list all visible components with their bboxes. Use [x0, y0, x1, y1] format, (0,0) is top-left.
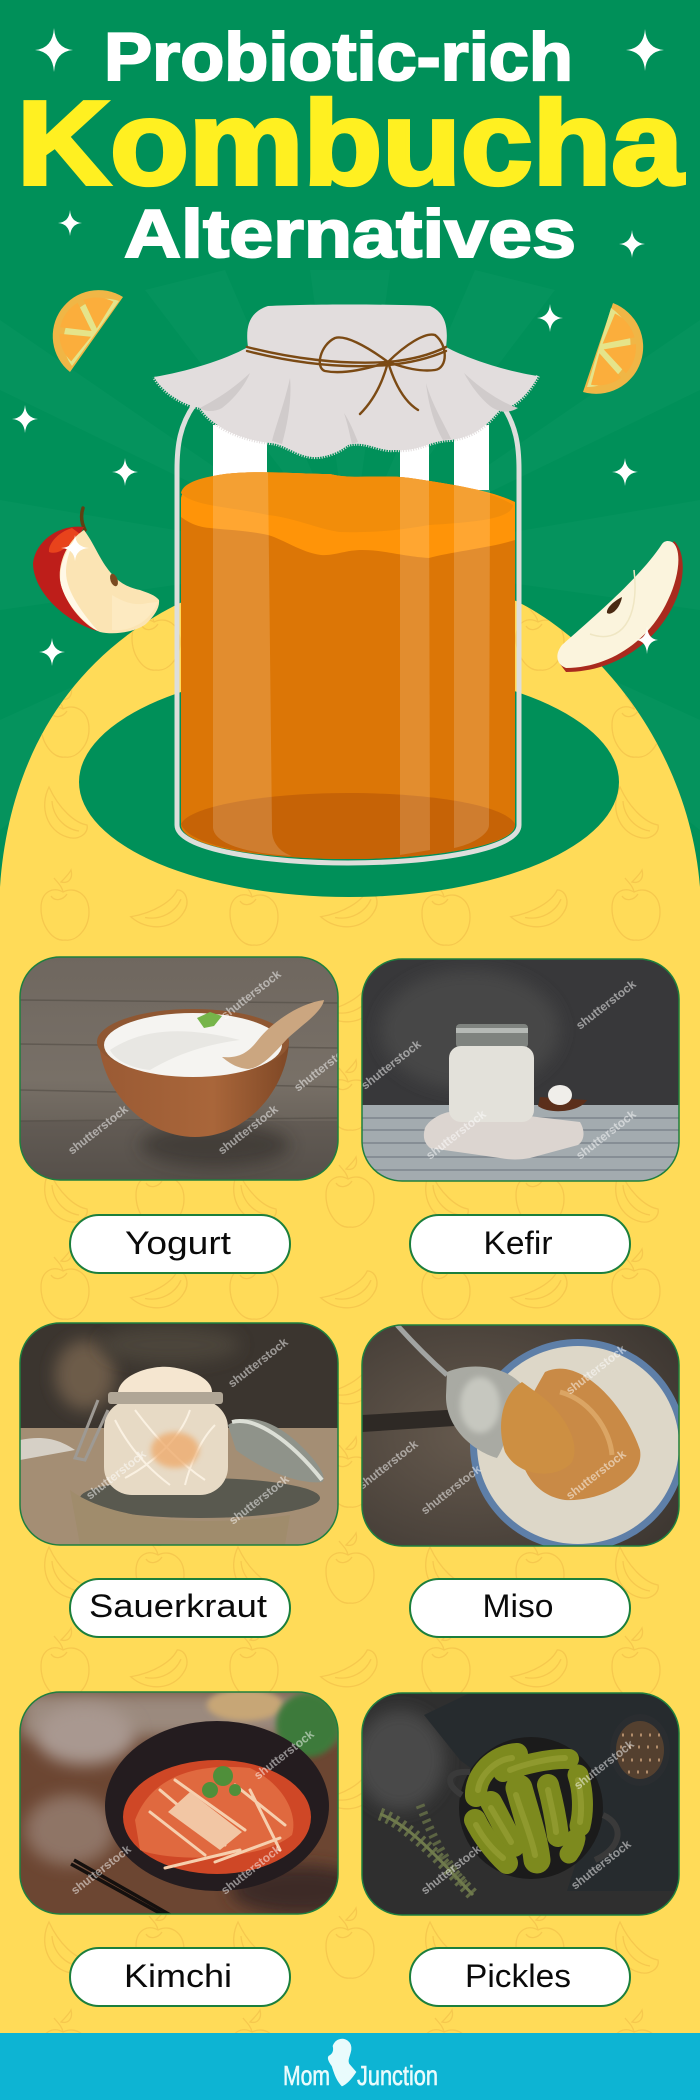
- photo: miso: [355, 1325, 686, 1551]
- photo: kefir: shutterstock: [573, 1107, 639, 1162]
- label: Sauerkraut: Sauerkraut: [89, 1588, 267, 1624]
- photo: miso: shutterstock: [355, 1437, 421, 1492]
- title line: Kombucha: Kombucha: [17, 77, 684, 210]
- photo: pickles: shutterstock: [568, 1837, 634, 1892]
- photo: kefir: shutterstock: [423, 1107, 489, 1162]
- photo frame: pickles: [362, 1693, 679, 1915]
- glass outline: [177, 405, 519, 863]
- icon: white apple wedge right: [557, 541, 683, 672]
- kombucha liquid: [181, 472, 515, 859]
- yellow arch: [0, 582, 700, 2100]
- darker liquid base: [181, 793, 515, 859]
- green ellipse under jar: [79, 667, 619, 897]
- glass reflections over liquid: [213, 472, 490, 856]
- label: Pickles: [410, 1948, 630, 2006]
- label: Kimchi: [70, 1948, 290, 2006]
- photo: yogurt: shutterstock: [291, 1039, 357, 1094]
- photo: pickles: shutterstock: [418, 1842, 484, 1897]
- label: Kefir: [410, 1215, 630, 1273]
- photo: sauerkraut: shutterstock: [226, 1472, 292, 1527]
- photo: kimchi: shutterstock: [68, 1842, 134, 1897]
- photo frame: miso: [362, 1325, 679, 1546]
- title line: Probiotic-rich: Probiotic-rich: [104, 19, 573, 95]
- photo: kefir: shutterstock: [358, 1037, 424, 1092]
- photo: yogurt: shutterstock: [215, 1102, 281, 1157]
- footer band: [0, 2033, 700, 2100]
- photo: miso: shutterstock: [418, 1462, 484, 1517]
- title line: Alternatives: Alternatives: [124, 196, 576, 272]
- MomJunction logo: Junction: [357, 2060, 438, 2091]
- photo: yogurt: shutterstock: [65, 1102, 131, 1157]
- sparkles: [12, 28, 664, 666]
- photo frame: yogurt: [20, 957, 338, 1180]
- photo: yogurt: [20, 957, 357, 1181]
- fruit outline pattern: [41, 600, 660, 2080]
- MomJunction logo: [283, 2039, 438, 2091]
- cloth fold shadows: [200, 373, 518, 444]
- photo: sauerkraut: shutterstock: [225, 1335, 291, 1390]
- MomJunction logo: Mom: [283, 2060, 330, 2091]
- cloth cover: [154, 304, 538, 457]
- label: Yogurt: Yogurt: [125, 1225, 231, 1261]
- photo: sauerkraut: [20, 1323, 338, 1546]
- icon: orange slice left: [53, 290, 123, 372]
- photo: pickles: [355, 1693, 679, 1915]
- photo: kimchi: shutterstock: [218, 1842, 284, 1897]
- photo frame: kimchi: [20, 1692, 338, 1914]
- photo: kefir: shutterstock: [573, 977, 639, 1032]
- label: Kimchi: Kimchi: [124, 1958, 232, 1994]
- photo frame: kefir: [362, 959, 679, 1181]
- photo: miso: shutterstock: [563, 1342, 629, 1397]
- photo: pickles: shutterstock: [571, 1737, 637, 1792]
- twine bow: [247, 335, 446, 414]
- icon: orange slice right: [583, 303, 643, 394]
- culture upper layer: [181, 472, 513, 532]
- label: Miso: [410, 1579, 630, 1637]
- icon: red apple wedge left: [33, 508, 159, 633]
- photo: sauerkraut: shutterstock: [83, 1447, 149, 1502]
- title: [17, 19, 684, 272]
- label: Yogurt: [70, 1215, 290, 1273]
- kombucha jar: [154, 304, 538, 863]
- photo: kefir: [358, 959, 679, 1181]
- jar highlight bars behind liquid: [213, 425, 489, 490]
- label: Sauerkraut: [70, 1579, 290, 1637]
- photo: kimchi: [20, 1692, 338, 1914]
- label: Miso: Miso: [482, 1588, 554, 1624]
- culture lower layer: [181, 472, 515, 558]
- photo: kimchi: shutterstock: [251, 1727, 317, 1782]
- photo frame: sauerkraut: [20, 1323, 338, 1545]
- label: Pickles: Pickles: [465, 1958, 571, 1994]
- icon: mother and child: [328, 2039, 356, 2086]
- photo: miso: shutterstock: [563, 1447, 629, 1502]
- label: Kefir: Kefir: [484, 1225, 553, 1261]
- photo: yogurt: shutterstock: [218, 967, 284, 1022]
